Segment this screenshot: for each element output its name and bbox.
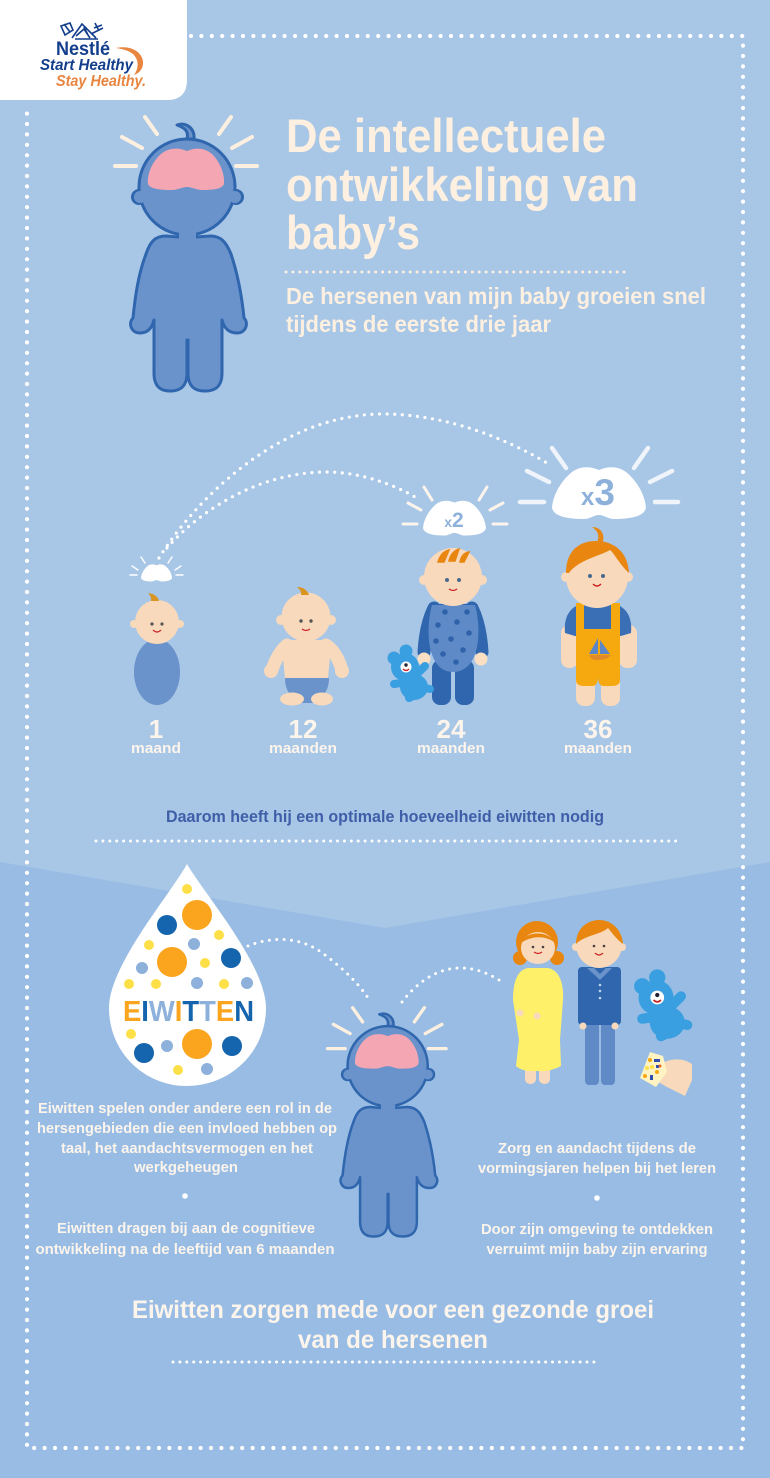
age labels: maanden (417, 740, 485, 757)
logo text: Stay Healthy. (56, 73, 146, 90)
mother (513, 921, 564, 1084)
conclusion (132, 1296, 654, 1354)
icon: protein drop (109, 864, 266, 1086)
icon: baby with brain (115, 117, 257, 391)
logo text (40, 39, 146, 90)
subtitle: De hersenen van mijn baby groeien snel (286, 283, 706, 309)
text: care and environment (478, 1141, 716, 1258)
text: protein role: taal, het aandachtsvermogen en het (61, 1141, 313, 1157)
icon: picture book (640, 1052, 692, 1096)
age labels: 12 (289, 714, 317, 744)
protein need statement: Daarom heeft hij een optimale hoeveelheid eiwitten nodig (166, 807, 604, 826)
age labels: maanden (564, 740, 632, 757)
title: baby’s (286, 206, 420, 259)
age labels: maand (131, 740, 181, 757)
icon: teddy bear 2 (634, 969, 687, 1039)
text: protein role (36, 1101, 337, 1258)
lower background panel (0, 862, 770, 1478)
text: care and environment: Zorg en aandacht tijdens de (498, 1141, 696, 1157)
title: De intellectuele (286, 109, 606, 162)
baby: 12 months (264, 587, 349, 706)
age labels: 36 (584, 714, 612, 744)
age labels: 1 (149, 714, 163, 744)
text: protein role: hersengebieden die een invloed hebben op (37, 1121, 337, 1137)
conclusion: Eiwitten zorgen mede voor een gezonde groei (132, 1296, 654, 1324)
icon: nest (61, 23, 103, 39)
logo text: Nestlé (56, 39, 110, 60)
arrows: brain growth arcs (159, 414, 547, 558)
icon: second baby with brain (328, 1008, 446, 1236)
logo text: Start Healthy (40, 57, 134, 74)
text: protein role: Eiwitten spelen onder andere een rol in de (38, 1101, 332, 1117)
text: care and environment: vormingsjaren helpen bij het leren (478, 1161, 716, 1177)
text: protein role: werkgeheugen (133, 1160, 238, 1176)
icon: brain 1 month (130, 557, 183, 581)
icon: brain x3: x3 (581, 472, 615, 513)
icon: brain x2: x2 (444, 509, 464, 532)
title (286, 109, 638, 259)
text: care and environment: verruimt mijn baby zijn ervaring (486, 1242, 708, 1258)
father (572, 920, 626, 1085)
icon: brain x2 (403, 487, 507, 536)
baby: 1 month (130, 593, 184, 705)
age labels: maanden (269, 740, 337, 757)
baby: 24 months (418, 548, 488, 705)
icon: brain x3 (520, 448, 678, 519)
icon: teddy bear (388, 644, 430, 700)
arrows: to baby (248, 939, 505, 1002)
icon: protein drop: EIWITTEN (123, 996, 254, 1028)
text: protein role: Eiwitten dragen bij aan de cognitieve (57, 1221, 315, 1237)
subtitle (286, 283, 706, 337)
text: care and environment: Door zijn omgeving te ontdekken (481, 1222, 713, 1238)
age labels: 24 (437, 714, 466, 744)
age labels (131, 714, 632, 757)
baby: 36 months (561, 527, 637, 706)
title: ontwikkeling van (286, 158, 638, 211)
logo panel (0, 0, 187, 100)
subtitle: tijdens de eerste drie jaar (286, 311, 551, 337)
conclusion: van de hersenen (298, 1326, 488, 1354)
text: protein role: ontwikkeling na de leeftijd van 6 maanden (36, 1242, 334, 1258)
